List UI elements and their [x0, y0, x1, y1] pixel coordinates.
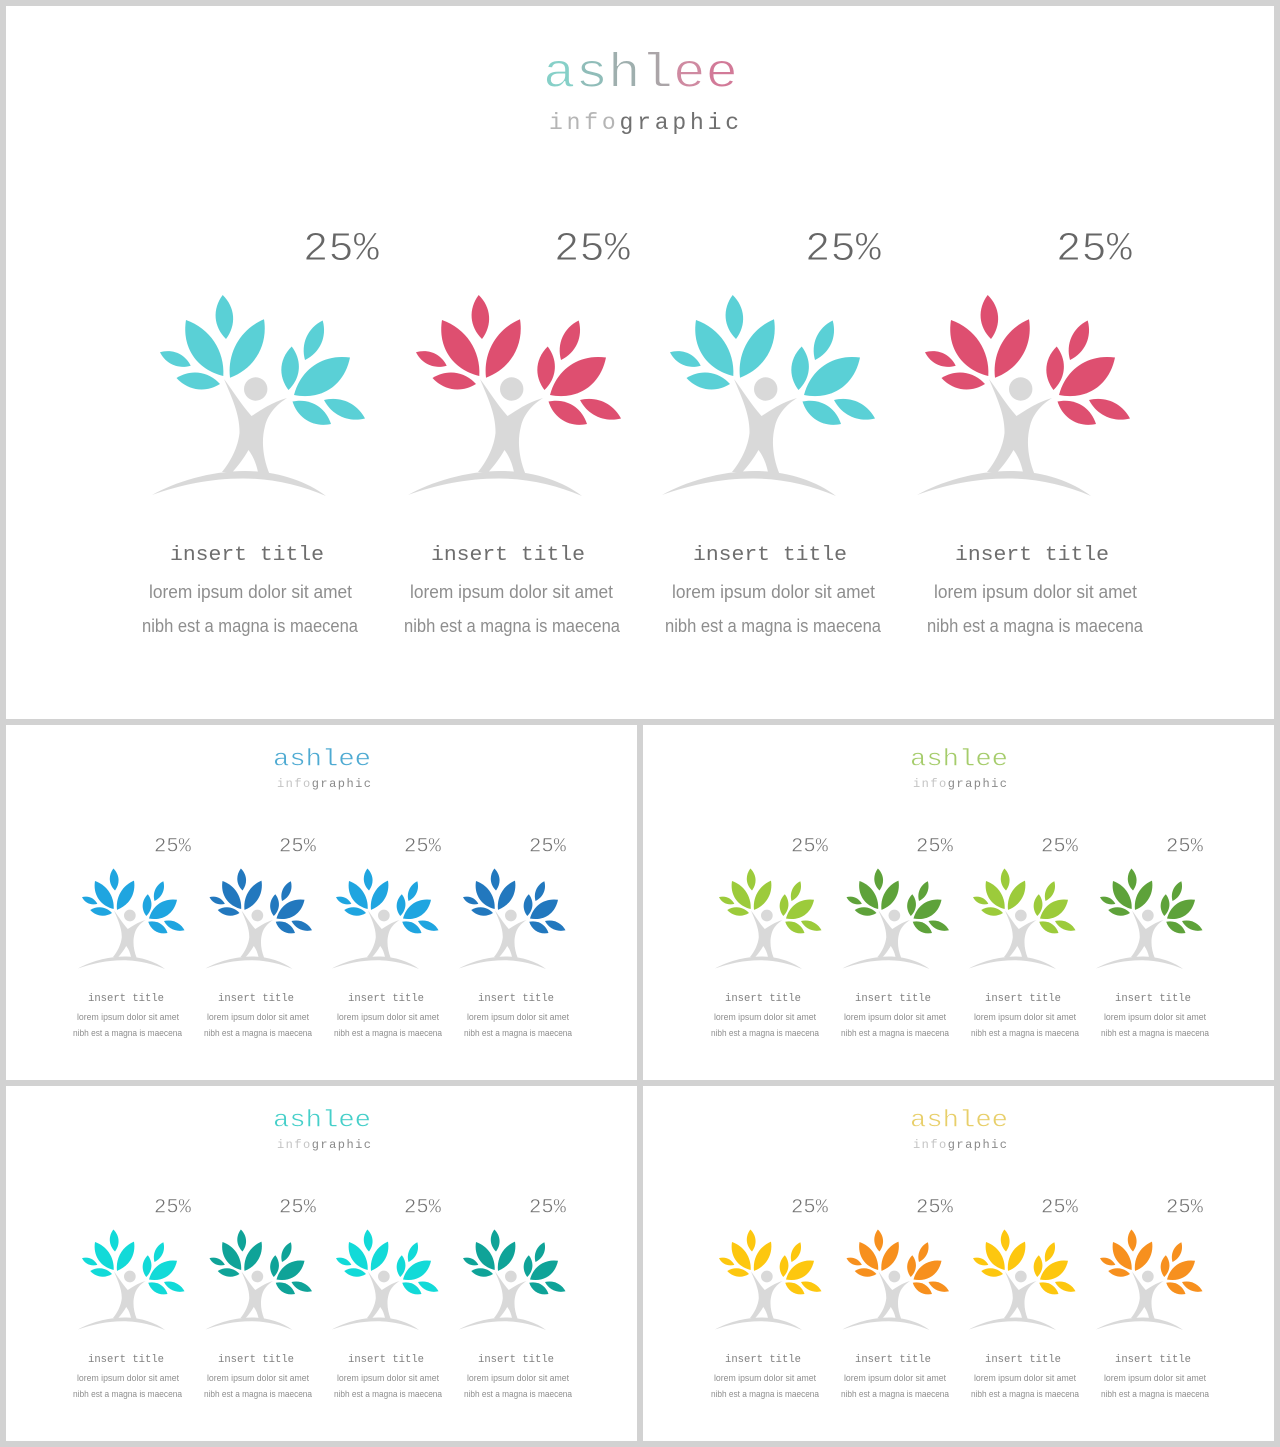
column descriptions: lorem ipsum dolor sit amet — [207, 1373, 309, 1383]
column titles: insert title — [88, 1354, 164, 1366]
column descriptions: nibh est a magna is maecena — [334, 1028, 442, 1038]
column descriptions: lorem ipsum dolor sit amet — [337, 1012, 439, 1022]
column descriptions: nibh est a magna is maecena — [204, 1028, 312, 1038]
column descriptions: lorem ipsum dolor sit amet — [1104, 1373, 1206, 1383]
subtitle: infographic — [913, 1138, 1007, 1152]
column descriptions — [711, 1373, 1209, 1399]
panel: teal variant — [6, 1086, 637, 1441]
percentages — [791, 1196, 1204, 1220]
percentages: 25% — [791, 1196, 829, 1220]
percentages — [154, 836, 567, 858]
percentages: 25% — [916, 836, 954, 858]
panel: blue variant — [6, 725, 637, 1080]
column descriptions: lorem ipsum dolor sit amet — [714, 1012, 816, 1022]
title: ashlee — [273, 746, 371, 774]
percentages: 25% — [554, 227, 630, 273]
column descriptions: lorem ipsum dolor sit amet — [714, 1373, 816, 1383]
column descriptions: lorem ipsum dolor sit amet — [467, 1373, 569, 1383]
subtitle: infographic: infographic — [549, 110, 739, 136]
column descriptions — [142, 582, 1144, 636]
column titles: insert title — [431, 544, 585, 567]
subtitle: infographic — [277, 1138, 371, 1152]
percentages: 25% — [1041, 1196, 1079, 1220]
column titles: insert title — [985, 1354, 1061, 1366]
column descriptions: nibh est a magna is maecena — [971, 1028, 1079, 1038]
subtitle: infographic — [913, 777, 1007, 791]
column titles — [725, 1354, 1191, 1366]
column titles: insert title — [1115, 993, 1191, 1005]
column descriptions: lorem ipsum dolor sit amet — [207, 1012, 309, 1022]
column descriptions: nibh est a magna is maecena — [1101, 1389, 1209, 1399]
percentages: 25% — [154, 836, 192, 858]
column titles: insert title — [218, 993, 294, 1005]
column descriptions: lorem ipsum dolor sit amet — [77, 1373, 179, 1383]
column descriptions: nibh est a magna is maecena — [841, 1028, 949, 1038]
percentages — [154, 1196, 567, 1220]
column descriptions: nibh est a magna is maecena — [971, 1389, 1079, 1399]
column descriptions: nibh est a magna is maecena — [334, 1389, 442, 1399]
tree icons — [78, 1230, 566, 1330]
percentages: 25% — [529, 1196, 567, 1220]
tree icons — [715, 868, 1202, 969]
column descriptions: nibh est a magna is maecena — [73, 1389, 182, 1399]
column descriptions: nibh est a magna is maecena — [464, 1028, 572, 1038]
column titles: insert title — [170, 544, 324, 567]
tree icons — [152, 295, 1130, 496]
column titles: insert title — [478, 1354, 554, 1366]
column descriptions: lorem ipsum dolor sit amet — [337, 1373, 439, 1383]
column descriptions: lorem ipsum dolor sit amet — [410, 582, 613, 602]
column descriptions: nibh est a magna is maecena — [841, 1389, 949, 1399]
percentages: 25% — [404, 836, 442, 858]
percentages: 25% — [404, 1196, 442, 1220]
column titles: insert title — [348, 993, 424, 1005]
column titles: insert title — [1115, 1354, 1191, 1366]
tree icons — [78, 868, 566, 969]
column titles: insert title — [985, 993, 1061, 1005]
panel: yellow and orange variant — [643, 1086, 1274, 1441]
column descriptions: lorem ipsum dolor sit amet — [844, 1012, 946, 1022]
panel: main infographic — [6, 6, 1274, 719]
percentages: 25% — [279, 1196, 317, 1220]
column descriptions: lorem ipsum dolor sit amet — [672, 582, 875, 602]
title: ashlee — [910, 1108, 1008, 1134]
column descriptions: nibh est a magna is maecena — [204, 1389, 312, 1399]
column titles: insert title — [693, 544, 847, 567]
percentages: 25% — [1056, 227, 1132, 273]
column descriptions: nibh est a magna is maecena — [665, 616, 882, 636]
column descriptions: nibh est a magna is maecena — [73, 1028, 182, 1038]
column descriptions: lorem ipsum dolor sit amet — [974, 1012, 1076, 1022]
column descriptions: lorem ipsum dolor sit amet — [467, 1012, 569, 1022]
percentages: 25% — [791, 836, 829, 858]
column descriptions: nibh est a magna is maecena — [464, 1389, 572, 1399]
column titles: insert title — [218, 1354, 294, 1366]
percentages — [303, 227, 1132, 273]
subtitle: infographic — [277, 777, 371, 791]
panel: green variant — [643, 725, 1274, 1080]
column descriptions: lorem ipsum dolor sit amet — [149, 582, 352, 602]
title: ashlee: ashlee — [543, 48, 738, 102]
title: ashlee — [910, 746, 1008, 774]
title: ashlee — [273, 1108, 371, 1134]
column titles: insert title — [88, 993, 164, 1005]
column titles — [88, 993, 554, 1005]
column titles — [725, 993, 1191, 1005]
column descriptions: nibh est a magna is maecena — [404, 616, 621, 636]
column descriptions: lorem ipsum dolor sit amet — [844, 1373, 946, 1383]
column descriptions — [73, 1373, 572, 1399]
column titles: insert title — [348, 1354, 424, 1366]
percentages: 25% — [529, 836, 567, 858]
column descriptions — [73, 1012, 572, 1038]
tree icons — [715, 1230, 1202, 1330]
percentages: 25% — [303, 227, 379, 273]
column titles: insert title — [725, 1354, 801, 1366]
column descriptions: nibh est a magna is maecena — [711, 1028, 819, 1038]
column descriptions — [711, 1012, 1209, 1038]
percentages: 25% — [279, 836, 317, 858]
column titles: insert title — [855, 1354, 931, 1366]
percentages: 25% — [1166, 836, 1204, 858]
column titles — [88, 1354, 554, 1366]
percentages: 25% — [805, 227, 881, 273]
column descriptions: lorem ipsum dolor sit amet — [1104, 1012, 1206, 1022]
percentages: 25% — [916, 1196, 954, 1220]
column titles: insert title — [725, 993, 801, 1005]
column titles — [170, 544, 1109, 567]
percentages: 25% — [1041, 836, 1079, 858]
column descriptions: lorem ipsum dolor sit amet — [934, 582, 1137, 602]
column descriptions: nibh est a magna is maecena — [927, 616, 1144, 636]
percentages — [791, 836, 1204, 858]
column titles: insert title — [855, 993, 931, 1005]
column descriptions: nibh est a magna is maecena — [142, 616, 359, 636]
column descriptions: lorem ipsum dolor sit amet — [77, 1012, 179, 1022]
column descriptions: nibh est a magna is maecena — [1101, 1028, 1209, 1038]
column titles: insert title — [955, 544, 1109, 567]
column titles: insert title — [478, 993, 554, 1005]
percentages: 25% — [1166, 1196, 1204, 1220]
column descriptions: lorem ipsum dolor sit amet — [974, 1373, 1076, 1383]
column descriptions: nibh est a magna is maecena — [711, 1389, 819, 1399]
percentages: 25% — [154, 1196, 192, 1220]
